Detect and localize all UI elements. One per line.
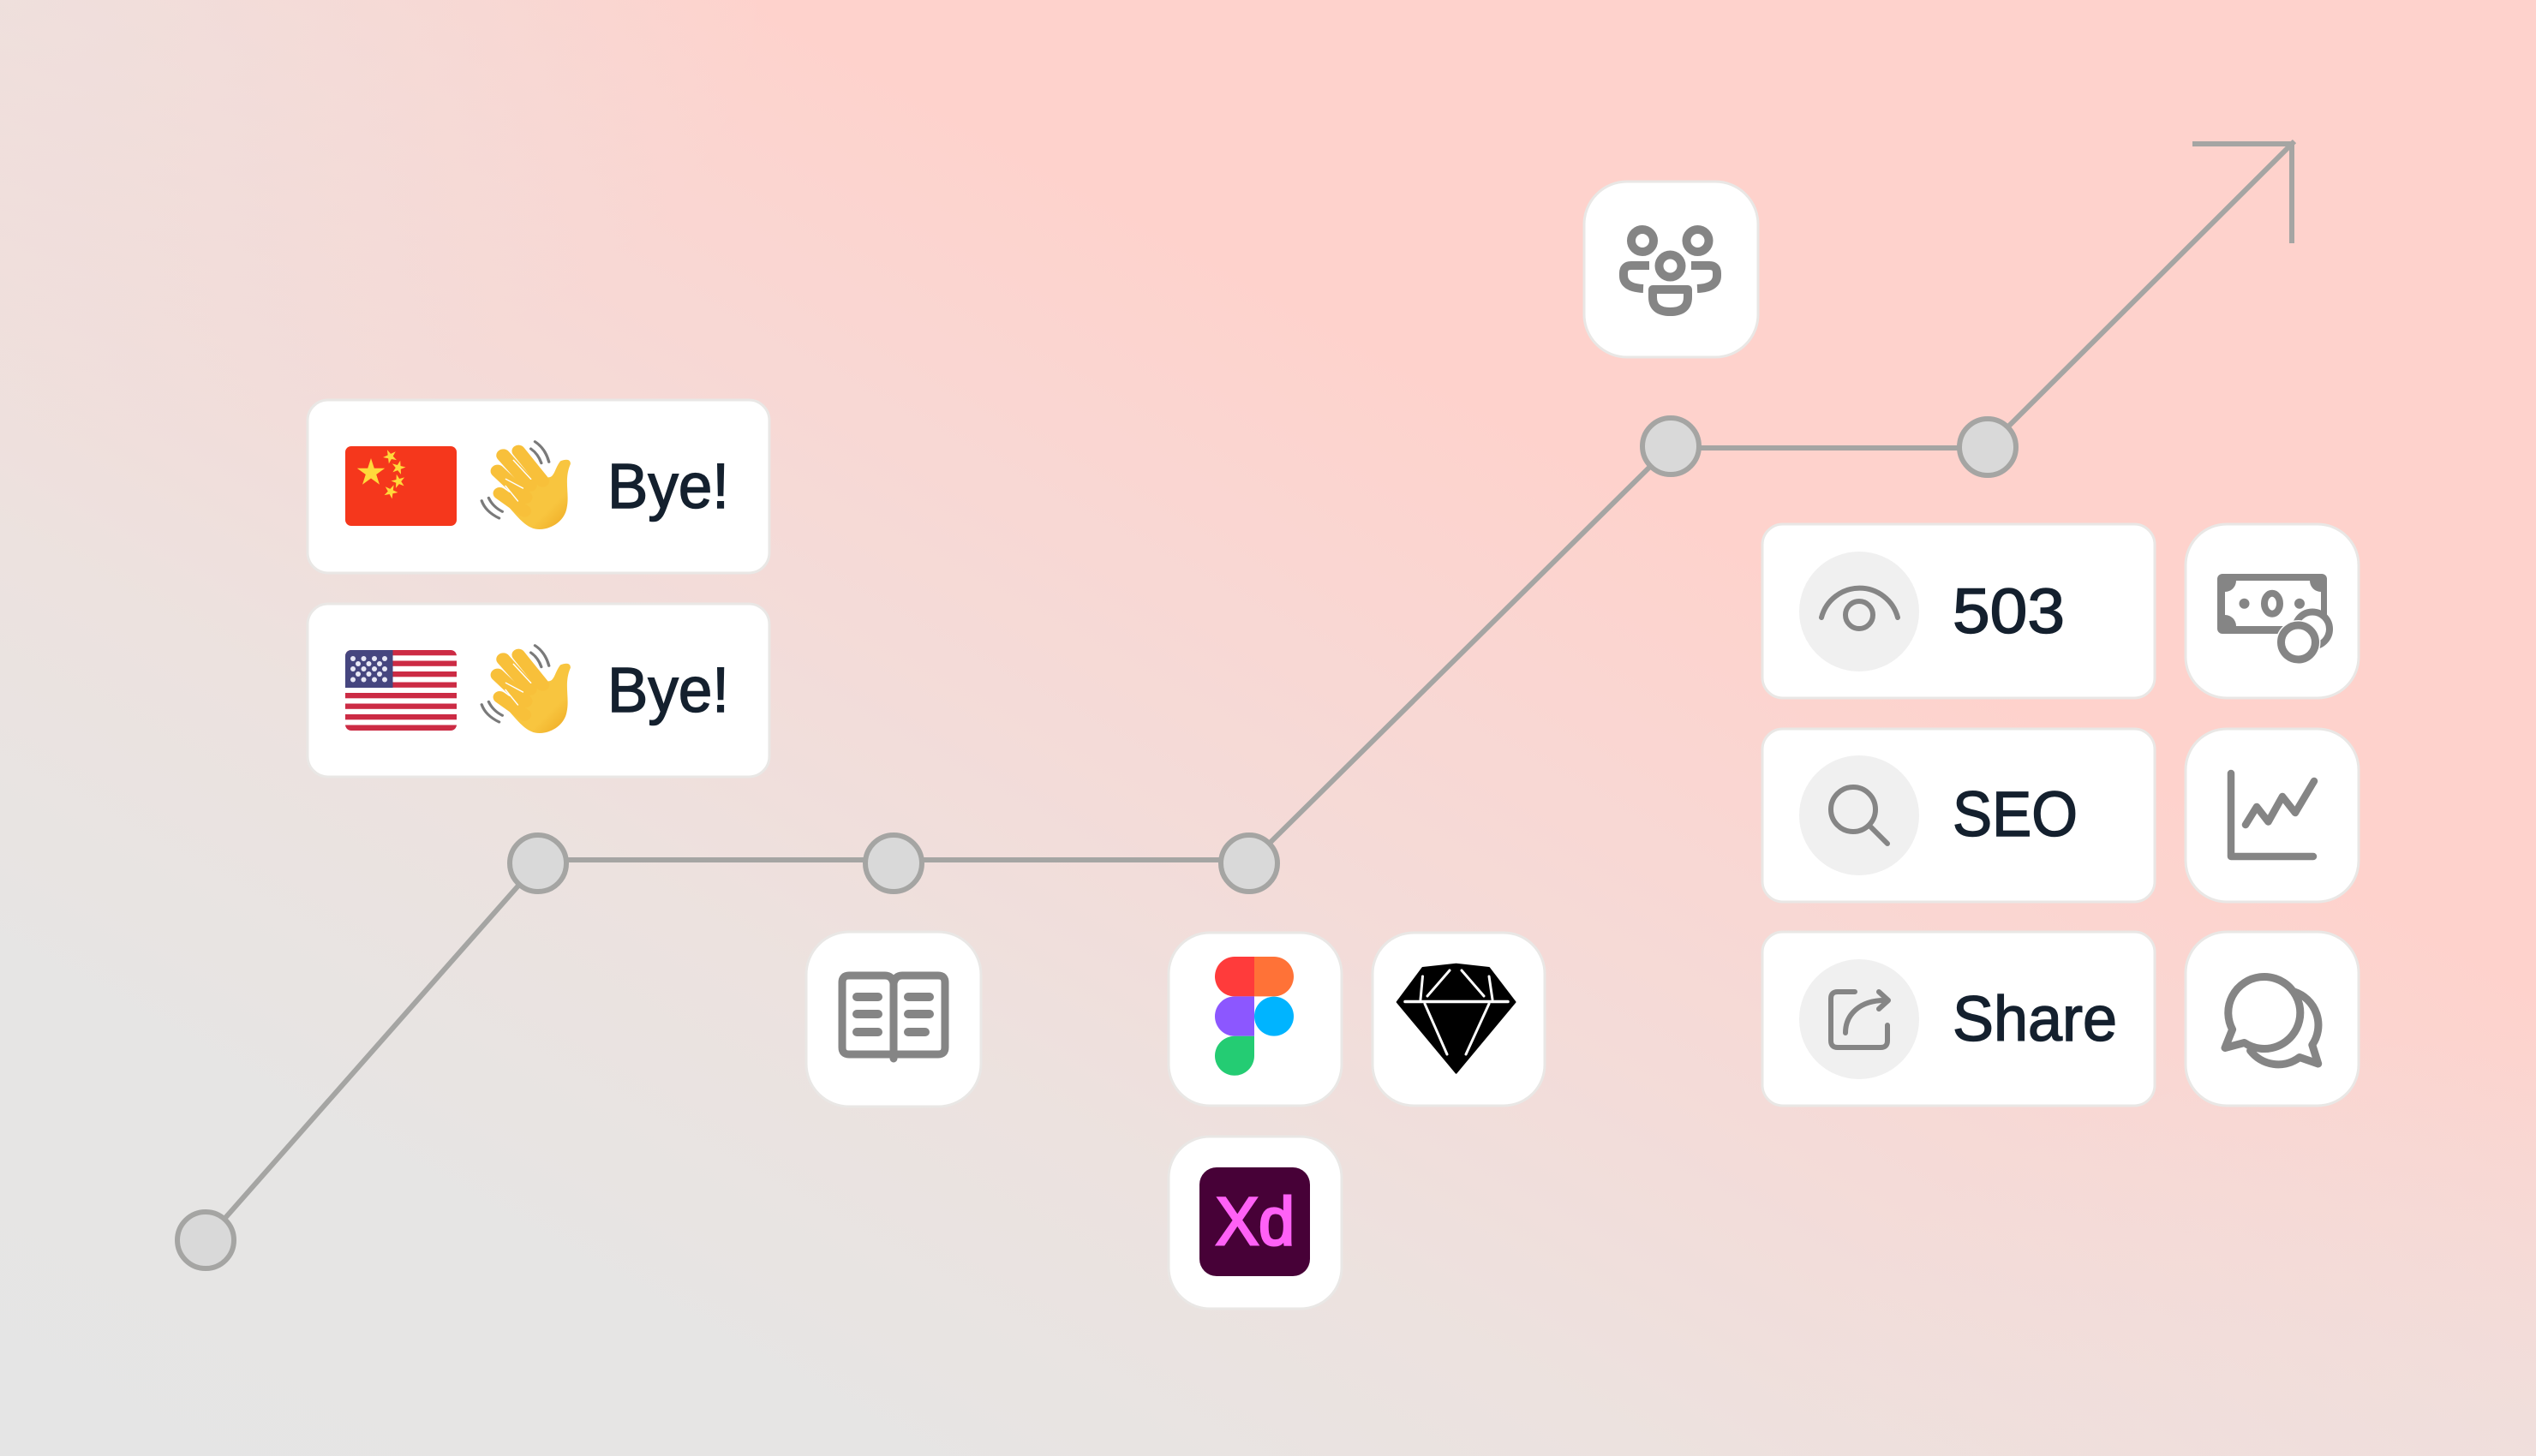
label: Share: Share bbox=[1953, 983, 2117, 1054]
icon: open book bbox=[842, 976, 945, 1059]
card: China flag greeting bbox=[308, 400, 769, 573]
icon: line chart bbox=[2231, 773, 2314, 856]
icon: Adobe XD tile: Xd bbox=[1216, 1183, 1295, 1259]
card: 503 views bbox=[1762, 524, 2155, 698]
card: Share bbox=[1762, 932, 2155, 1106]
card: Figma logo bbox=[1169, 933, 1342, 1106]
card: team icon bbox=[1584, 182, 1758, 357]
card: US flag greeting bbox=[308, 604, 769, 777]
label: 503: 503 bbox=[1953, 576, 2065, 647]
icon: chat bubbles bbox=[2225, 976, 2318, 1065]
icon: waving hand bbox=[481, 646, 571, 733]
card: SEO bbox=[1762, 729, 2155, 902]
card: money bbox=[2186, 524, 2359, 698]
icon: Figma bbox=[1215, 957, 1294, 1076]
growth line path bbox=[206, 141, 2294, 1240]
icon: eye bbox=[1799, 552, 1919, 671]
icon: share bbox=[1799, 959, 1919, 1079]
card: Sketch logo bbox=[1373, 933, 1545, 1106]
path nodes bbox=[177, 418, 2016, 1268]
label: Bye!: Bye! bbox=[607, 654, 729, 725]
label: Bye!: Bye! bbox=[607, 451, 729, 522]
label: SEO: SEO bbox=[1953, 779, 2078, 850]
icon: Sketch diamond bbox=[1397, 964, 1515, 1073]
card: chat bbox=[2186, 932, 2359, 1106]
infographic canvas bbox=[175, 140, 2360, 1307]
icon: waving hand bbox=[481, 442, 571, 529]
icon: magnifier bbox=[1799, 755, 1919, 875]
icon: China flag bbox=[345, 446, 457, 526]
card: chart bbox=[2186, 729, 2359, 902]
card: book icon bbox=[806, 932, 981, 1107]
arrow head bbox=[2192, 144, 2292, 243]
icon: three users bbox=[1624, 230, 1717, 312]
icon: banknote and coins bbox=[2217, 574, 2330, 664]
icon: US flag bbox=[345, 650, 457, 731]
icon: Adobe XD tile bbox=[1199, 1167, 1310, 1276]
card: Adobe XD logo bbox=[1169, 1137, 1342, 1309]
